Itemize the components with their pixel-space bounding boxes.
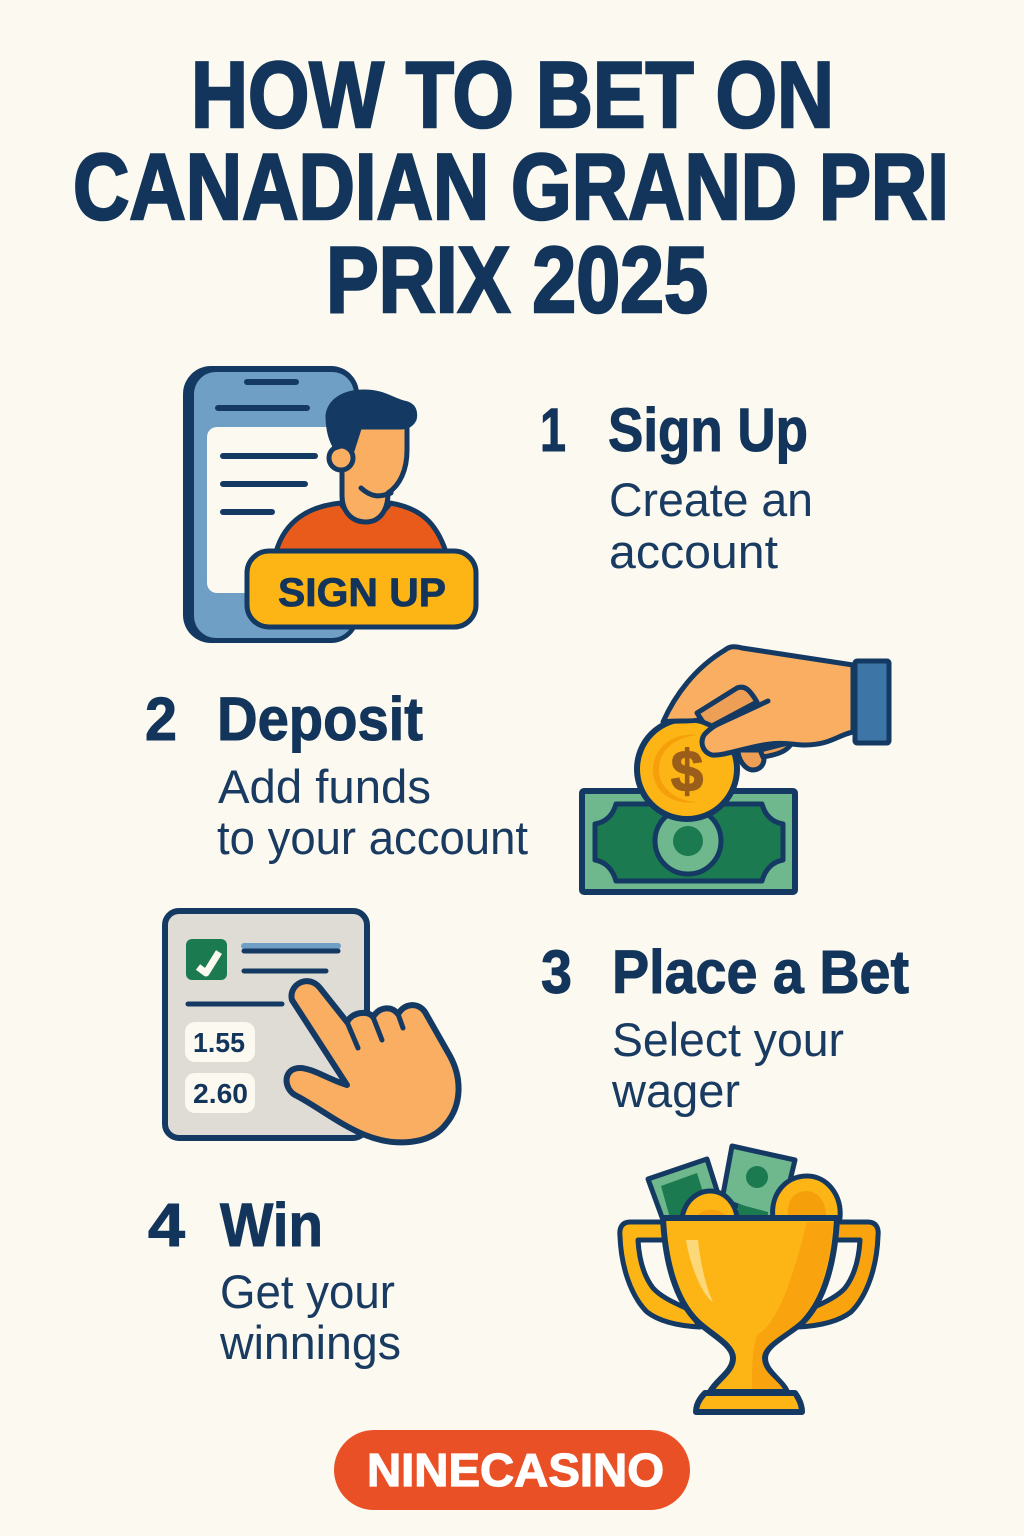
logo pill: NINECASINO: [334, 1430, 690, 1510]
odds 2.60: [185, 1073, 255, 1113]
step 4 text: [148, 1191, 401, 1369]
title: [73, 42, 949, 332]
right banknote: [722, 1146, 795, 1222]
step 1 text: Sign Up: [608, 396, 808, 464]
step 2 text: 2: [145, 685, 177, 753]
step 4 text: Win: [220, 1191, 323, 1259]
icon: phone with person and sign up badge: [183, 366, 476, 643]
step 2 text: to your account: [217, 811, 528, 864]
step 2 text: Deposit: [217, 685, 423, 753]
cup: [663, 1218, 837, 1392]
step 2 text: [145, 685, 528, 864]
title: HOW TO BET ON: [191, 42, 834, 147]
step 1 text: Create an: [609, 473, 813, 526]
sign up badge: SIGN UP: [278, 571, 446, 615]
coins: [682, 1191, 737, 1218]
odds 2.60: 2.60: [193, 1078, 248, 1109]
left banknote: [648, 1159, 720, 1220]
logo pill: NINECASINO: NINECASINO: [367, 1444, 664, 1496]
coin: [637, 719, 737, 819]
base: [696, 1393, 802, 1412]
cuff: [855, 661, 889, 743]
coin: $: [671, 739, 703, 804]
hand: [663, 647, 853, 755]
sign up badge: [247, 551, 476, 627]
pointing hand: [287, 981, 459, 1142]
odds 1.55: [185, 1022, 255, 1062]
step 1 text: 1: [540, 396, 566, 464]
step 1 text: [540, 396, 813, 578]
step 3 text: Place a Bet: [612, 938, 909, 1006]
handles: [620, 1222, 700, 1327]
step 3 text: wager: [611, 1064, 740, 1117]
step 4 text: winnings: [219, 1316, 401, 1369]
step 2 text: Add funds: [218, 760, 431, 813]
step 1 text: account: [609, 525, 778, 578]
step 3 text: Select your: [612, 1013, 844, 1066]
icon: trophy with money: [620, 1146, 878, 1412]
step 3 text: [541, 938, 909, 1117]
icon: bet slip with pointing hand: [165, 911, 459, 1142]
title: PRIX 2025: [326, 227, 708, 332]
banknote: [582, 791, 795, 892]
icon: hand dropping coin on banknote: [582, 647, 889, 892]
step 3 text: 3: [541, 938, 572, 1006]
checkbox: [186, 939, 227, 980]
odds 1.55: 1.55: [193, 1027, 245, 1058]
step 4 text: Get your: [220, 1265, 395, 1318]
hand back fingers: [738, 750, 764, 770]
step 4 text: 4: [148, 1191, 185, 1259]
